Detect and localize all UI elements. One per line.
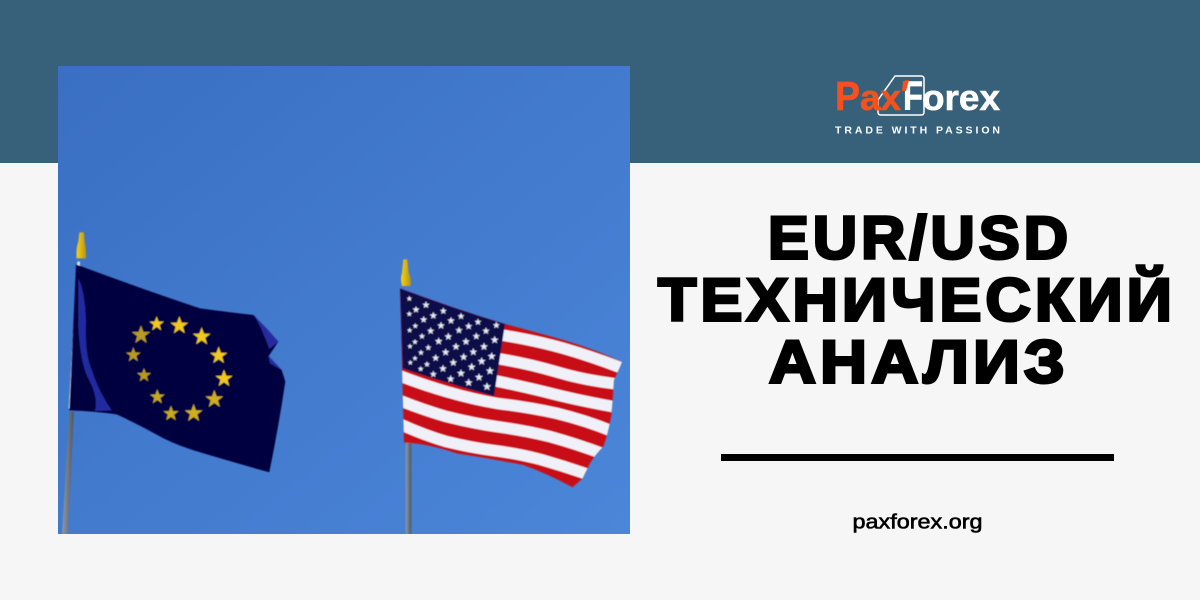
- stars: [126, 316, 233, 421]
- title: EUR/USD: [768, 204, 1072, 272]
- photo: EU and US flags against blue sky: [58, 66, 630, 534]
- icon: EU flag: [62, 232, 285, 534]
- stars: [406, 296, 500, 390]
- divider line: [721, 454, 1114, 461]
- logo: PaxForex: [835, 73, 1000, 136]
- icon: US flag: [390, 259, 630, 534]
- logo wordmark: F: [903, 73, 923, 119]
- logo tagline: TRADE WITH PASSION: [835, 124, 1000, 136]
- title: ТЕХНИЧЕСКИЙ: [658, 266, 1176, 334]
- logo wordmark: [835, 73, 1000, 119]
- logo wordmark: orex: [922, 77, 1000, 118]
- title: АНАЛИЗ: [769, 328, 1069, 396]
- title: [658, 204, 1176, 396]
- logo accent slash: [902, 80, 909, 91]
- logo wordmark: P: [835, 73, 860, 119]
- logo wordmark: ax: [860, 77, 901, 118]
- header band: [0, 0, 1200, 163]
- logo box: [878, 76, 924, 115]
- website url: paxforex.org: [852, 512, 982, 534]
